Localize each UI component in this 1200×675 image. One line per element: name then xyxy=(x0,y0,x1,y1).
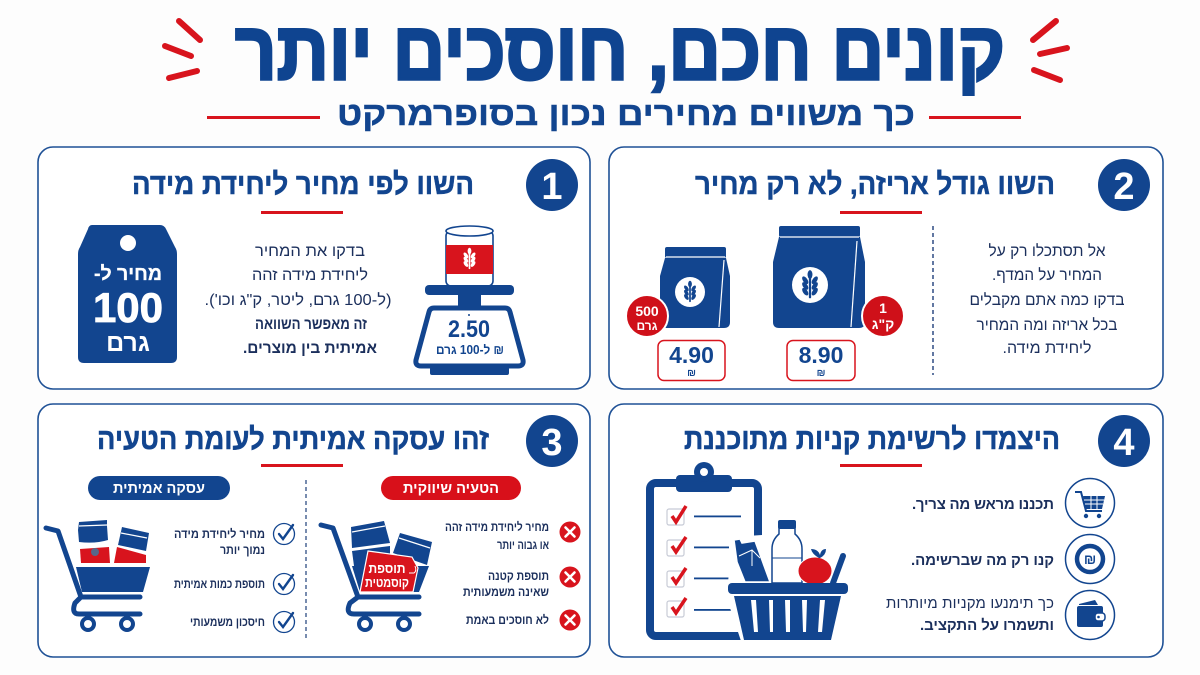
dashed divider xyxy=(932,226,934,375)
red promo label xyxy=(360,551,418,592)
item: small addition: תוספת קטנה xyxy=(488,569,549,583)
item: buy only listed xyxy=(911,534,1114,584)
body text 2 xyxy=(970,242,1125,357)
apple xyxy=(798,549,832,585)
item: small addition: שאינה משמעותית xyxy=(463,585,549,599)
item: plan ahead: תכננו מראש מה צריך. xyxy=(912,496,1054,513)
badge: 500 g: גרם xyxy=(637,319,658,333)
heading rule 4 xyxy=(840,464,922,467)
can xyxy=(446,226,493,286)
icon: cart xyxy=(1075,492,1105,518)
checklist xyxy=(667,506,741,617)
icon: small bag xyxy=(660,247,730,328)
white backing xyxy=(726,520,850,644)
cart frame xyxy=(321,525,419,614)
icon: left red burst xyxy=(165,21,200,78)
icon: shekel coin: ₪ xyxy=(1084,551,1096,567)
heading 1: השוו לפי מחיר ליחידת מידה xyxy=(132,168,474,201)
scale xyxy=(416,285,523,375)
body text 1 xyxy=(205,243,392,357)
badge: 1 kg: ק"ג xyxy=(872,316,894,332)
number badge 2 xyxy=(1098,159,1150,211)
panel: 2 package size xyxy=(609,147,1163,389)
item: plan ahead xyxy=(912,478,1114,528)
badge: 500 g xyxy=(626,295,668,337)
stick xyxy=(833,556,843,583)
pill: real deal: עסקה אמיתית xyxy=(113,481,205,497)
body text 2: ליחידת מידה. xyxy=(1002,339,1092,357)
icon: price tag: גרם xyxy=(106,329,150,357)
price box 4.90 xyxy=(658,340,725,380)
list: deception xyxy=(445,520,580,630)
body text 2: המחיר על המדף. xyxy=(992,266,1102,284)
pill: marketing deception: הטעיה שיווקית xyxy=(403,481,499,497)
body text 1: זה מאפשר השוואה xyxy=(255,316,367,333)
body text 2: אל תסתכלו רק על xyxy=(988,242,1106,260)
subtitle: כך משווים מחירים נכון בסופרמרקט xyxy=(337,95,915,132)
heading 4: היצמדו לרשימת קניות מתוכננת xyxy=(684,423,1060,456)
body text 1: בדקו את המחיר xyxy=(255,243,365,260)
item: buy only listed: קנו רק מה שברשימה. xyxy=(911,552,1054,569)
body text 2: בדקו כמה אתם מקבלים xyxy=(970,291,1125,309)
heading rule 2 xyxy=(840,211,922,214)
red promo label: קוסמטית xyxy=(365,575,409,590)
number badge 3 xyxy=(526,415,578,467)
list: real deal xyxy=(174,524,294,632)
icon: price tag xyxy=(78,225,177,363)
icon: deceptive cart xyxy=(321,521,432,630)
panel: 4 shopping list xyxy=(609,404,1163,657)
body text 1: (ל-100 גרם, ליטר, ק"ג וכו'). xyxy=(205,291,392,309)
panel: 3 real deal vs false xyxy=(38,404,590,657)
item: no saving: לא חוסכים באמת xyxy=(466,613,549,627)
icon: real deal cart xyxy=(46,520,150,630)
icon: can on scale xyxy=(416,226,523,375)
number badge 2: 2 xyxy=(1113,166,1135,208)
body text 2: בכל אריזה ומה המחיר xyxy=(976,316,1118,334)
bottle water line xyxy=(772,557,802,559)
pill: marketing deception xyxy=(381,476,521,500)
item: lower unit price: נמוך יותר xyxy=(220,543,265,557)
red promo label: תוספת xyxy=(368,561,406,576)
number badge 3: 3 xyxy=(541,422,563,464)
heading 2: השוו גודל אריזה, לא רק מחיר xyxy=(695,168,1055,201)
badge: 500 g: 500 xyxy=(635,303,659,319)
number badge 1 xyxy=(526,159,578,211)
item: real quantity: תוספת כמות אמיתית xyxy=(174,577,265,591)
badge: 1 kg: 1 xyxy=(879,300,887,316)
icon: grocery basket xyxy=(726,520,850,644)
item: same price xyxy=(445,520,580,552)
badge: 1 kg xyxy=(862,295,904,337)
scale: ₪ ל-100 גרם xyxy=(436,343,504,357)
price box 4.90: ₪ xyxy=(687,368,696,379)
icon: shekel coin xyxy=(1077,546,1103,572)
bottle xyxy=(772,528,802,583)
icon: right red burst xyxy=(1033,21,1067,80)
number badge 4: 4 xyxy=(1113,422,1135,464)
bottle cap xyxy=(778,520,796,529)
panel: 1 unit price xyxy=(38,147,1163,657)
item: significant saving: חיסכון משמעותי xyxy=(190,615,265,629)
price box 4.90: 4.90 xyxy=(669,342,714,368)
price box 8.90 xyxy=(787,340,855,380)
item: avoid excess xyxy=(886,590,1114,640)
price box 8.90: 8.90 xyxy=(799,342,843,368)
basket body xyxy=(734,596,841,640)
bags in cart xyxy=(78,520,149,563)
title: קונים חכם, חוסכים יותר xyxy=(235,6,1005,97)
icon: price tag: 100 xyxy=(93,284,163,331)
milk carton xyxy=(734,539,770,582)
number badge 1: 1 xyxy=(541,166,563,208)
icon: clipboard xyxy=(650,462,758,636)
price box 8.90: ₪ xyxy=(817,368,825,379)
item: avoid excess: כך תימנעו מקניות מיותרות xyxy=(886,595,1054,612)
scale: 2.50 xyxy=(448,316,490,343)
pill: real deal xyxy=(88,476,230,500)
body text 1: ליחידת מידה זהה xyxy=(252,266,368,284)
heading 3: זהו עסקה אמיתית לעומת הטעיה xyxy=(97,423,489,456)
icon: price tag: מחיר ל- xyxy=(94,263,162,285)
item: same price: או גבוה יותר xyxy=(497,538,549,552)
icon: wallet xyxy=(1077,600,1105,627)
number badge 4 xyxy=(1098,415,1150,467)
item: same price: מחיר ליחידת מידה זהה xyxy=(445,520,549,534)
dashed divider xyxy=(305,480,307,640)
cart frame xyxy=(46,528,140,614)
subtitle rule left xyxy=(207,116,320,119)
item: lower unit price xyxy=(174,524,294,557)
icon: large bag xyxy=(773,226,865,328)
item: lower unit price: מחיר ליחידת מידה xyxy=(174,527,265,541)
body text 1: אמיתית בין מוצרים. xyxy=(243,340,377,357)
subtitle rule right xyxy=(929,116,1021,119)
bags in cart xyxy=(351,521,432,566)
heading rule 1 xyxy=(261,211,343,214)
item: small addition xyxy=(463,566,580,599)
heading rule 3 xyxy=(261,464,343,467)
item: avoid excess: ותשמרו על התקציב. xyxy=(920,617,1054,634)
